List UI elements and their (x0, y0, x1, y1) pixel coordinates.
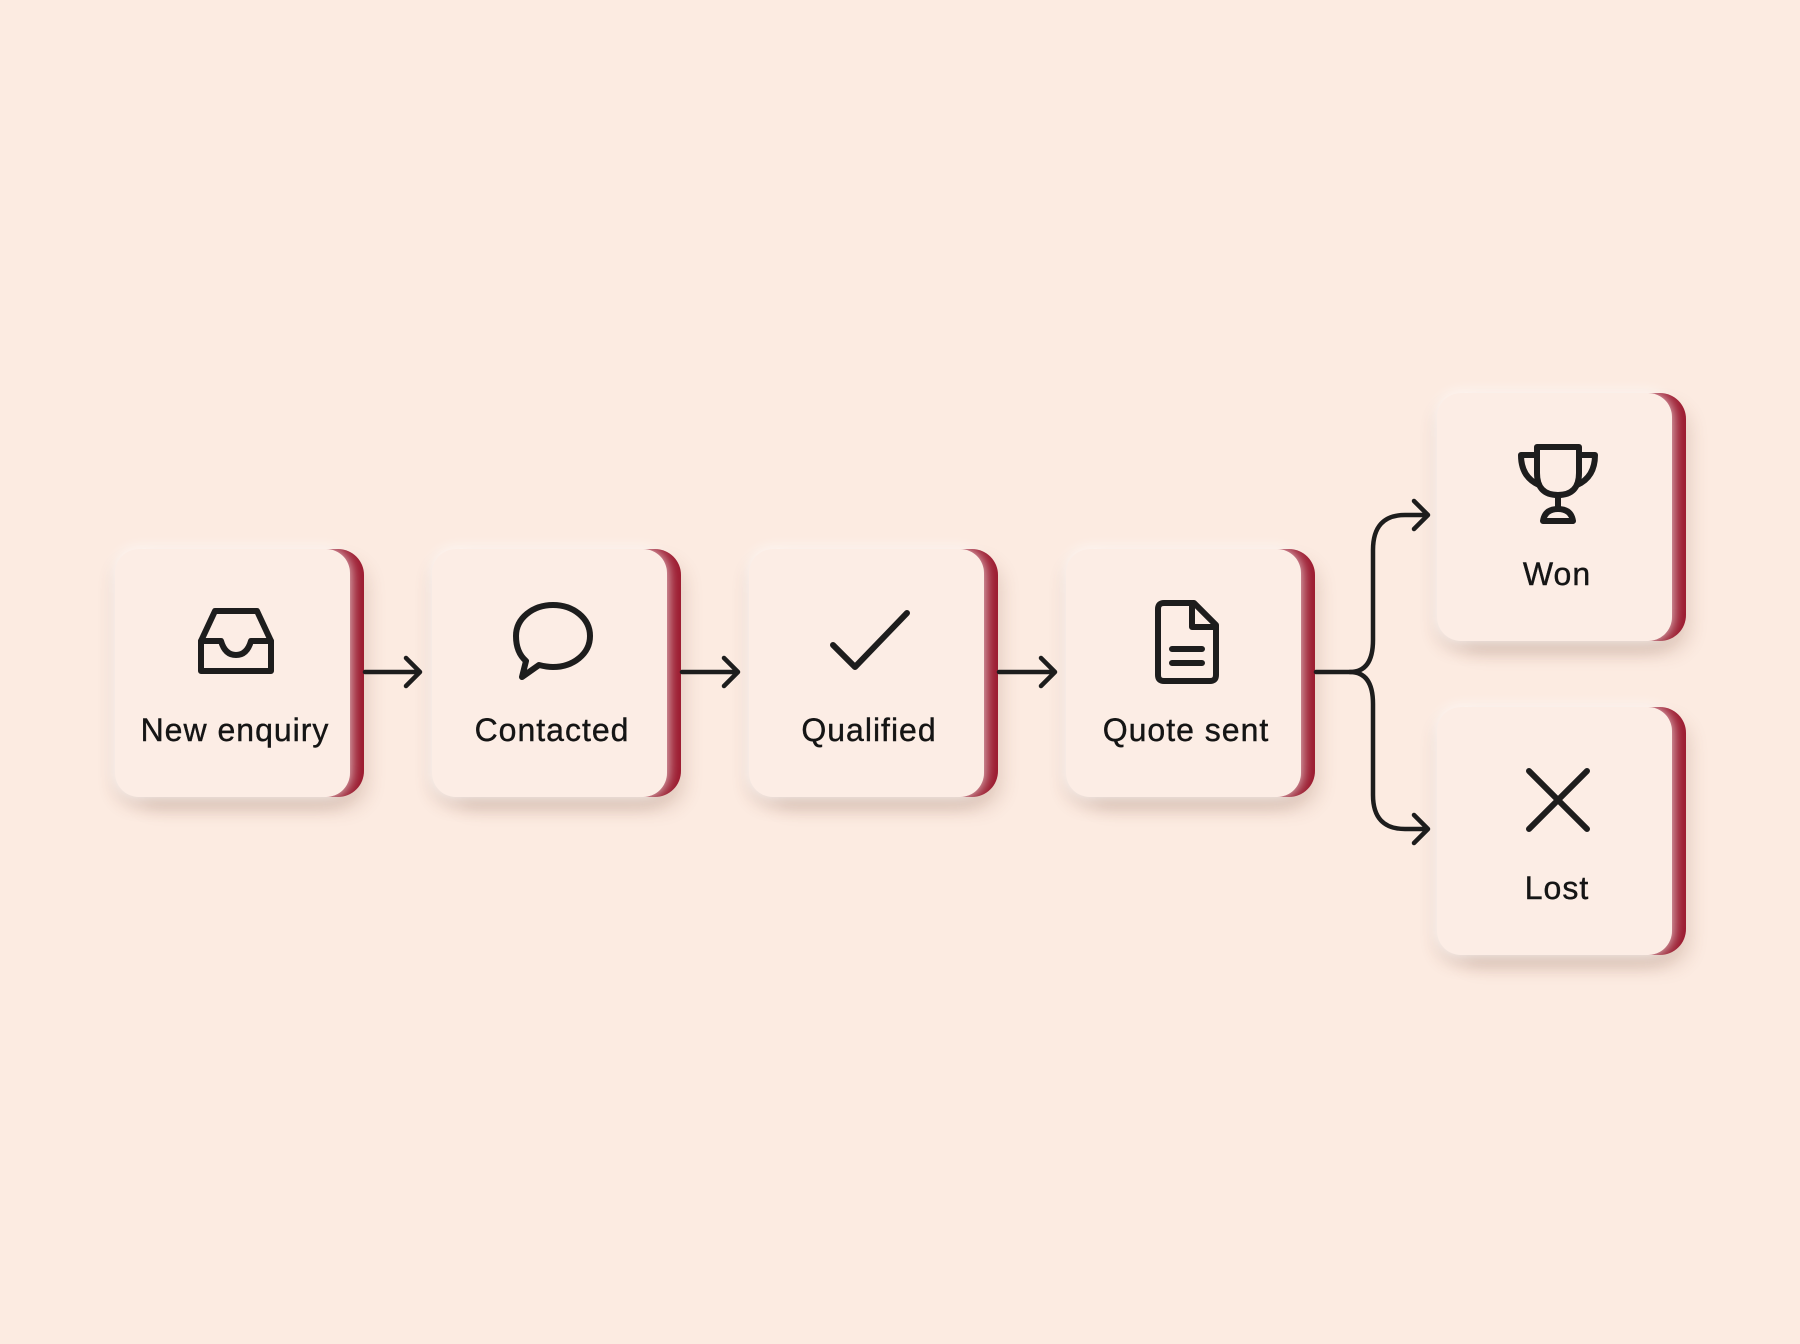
card: Contacted (430, 547, 691, 818)
arrow: contacted to qualified (682, 658, 738, 686)
arrow: enquiry to contacted (365, 658, 420, 686)
label: Lost (1525, 870, 1589, 906)
icon: cross (1526, 768, 1590, 832)
label: Won (1523, 556, 1591, 592)
icon: checkmark (830, 610, 910, 670)
label: Quote sent (1103, 712, 1269, 748)
icon: document (1155, 600, 1219, 684)
icon: inbox tray (198, 608, 274, 674)
card: New enquiry (113, 547, 374, 818)
icon: trophy (1518, 444, 1598, 524)
label: New enquiry (141, 712, 329, 748)
card: Lost (1435, 705, 1696, 976)
label: Contacted (475, 712, 629, 748)
label: Qualified (801, 712, 937, 748)
arrow: qualified to quote (999, 658, 1055, 686)
card: Won (1435, 391, 1696, 662)
arrow: branch to won and lost (1316, 501, 1428, 843)
card: Quote sent (1064, 547, 1325, 818)
icon: speech bubble (513, 602, 593, 680)
card: Qualified (747, 547, 1008, 818)
